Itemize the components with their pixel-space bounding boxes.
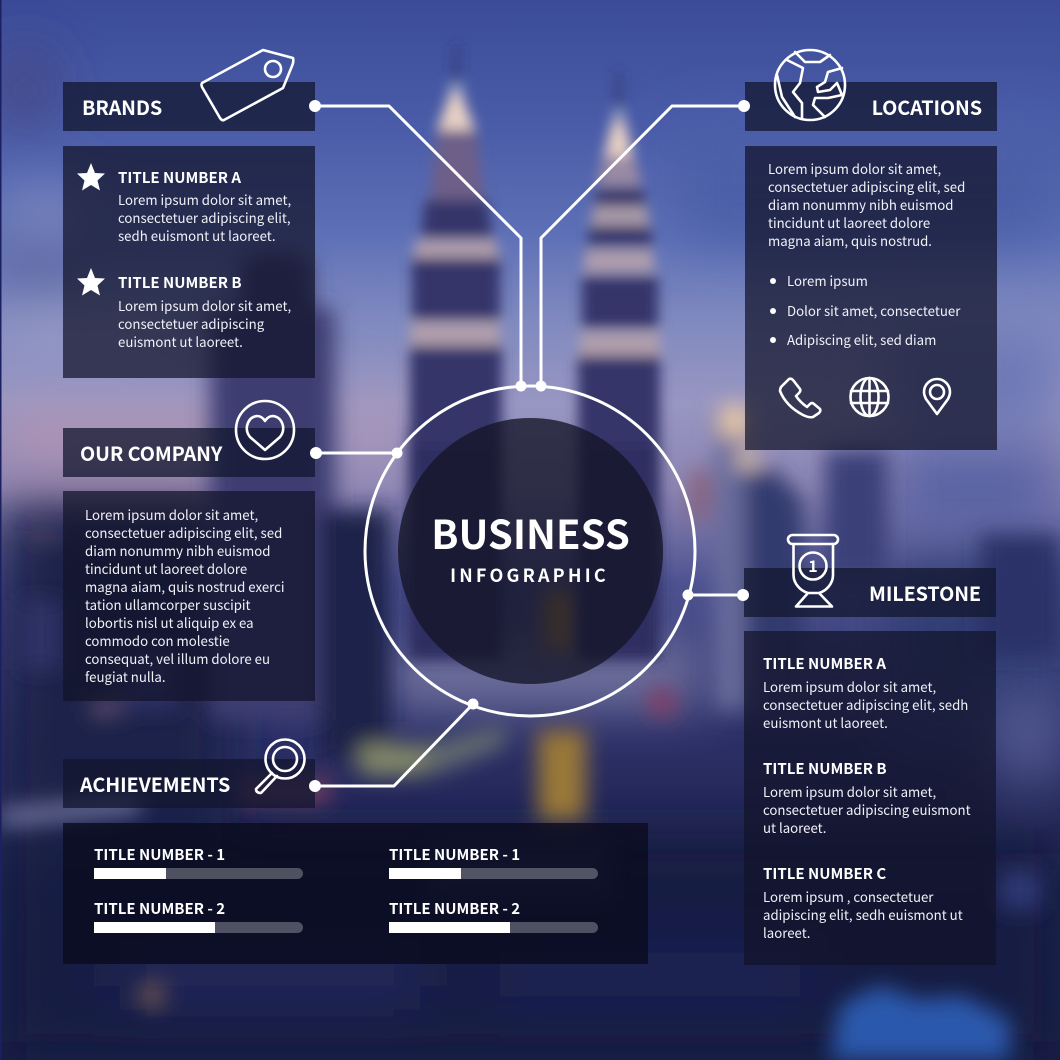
body B: [118, 296, 291, 351]
company text box: tation ullamcorper suscipit: [85, 595, 251, 614]
body A: [118, 190, 291, 245]
header: brands: [63, 82, 315, 131]
header: our company: [63, 428, 315, 477]
company text box: Lorem ipsum dolor sit amet,: [85, 505, 258, 524]
title A: TITLE NUMBER A: [763, 653, 886, 674]
brands content box: [63, 146, 315, 378]
bullet list: [770, 271, 960, 349]
company text box: tincidunt ut laoreet dolore: [85, 559, 247, 578]
title B: TITLE NUMBER B: [763, 758, 887, 779]
subtitle: INFOGRAPHIC: [450, 562, 609, 588]
intro text: [768, 159, 965, 250]
body A: [763, 677, 968, 732]
company text box: [63, 491, 315, 701]
body B: Lorem ipsum dolor sit amet,: [118, 296, 291, 315]
title C: TITLE NUMBER C: [763, 863, 886, 884]
body B: Lorem ipsum dolor sit amet,: [763, 782, 936, 801]
icon: earth globe: [774, 48, 846, 122]
body B: consectetuer adipiscing euismont: [763, 800, 971, 819]
company text box: diam nonummy nibh euismod: [85, 541, 270, 560]
icon: trophy: 1: [808, 553, 818, 577]
body A: consectetuer adipiscing elit,: [118, 208, 291, 227]
body A: Lorem ipsum dolor sit amet,: [118, 190, 291, 209]
icon: heart: [234, 400, 296, 460]
locations content box: [745, 146, 997, 450]
bar: left 2: TITLE NUMBER - 2: [94, 898, 225, 919]
intro text: consectetuer adipiscing elit, sed: [768, 177, 965, 196]
header: our company: OUR COMPANY: [80, 438, 222, 467]
company text box: consectetuer adipiscing elit, sed: [85, 523, 282, 542]
header: milestone: MILESTONE: [869, 578, 981, 607]
intro text: Lorem ipsum dolor sit amet,: [768, 159, 941, 178]
body B: ut laoreet.: [763, 818, 826, 837]
bullet list: Dolor sit amet, consectetuer: [787, 301, 960, 320]
centre circle with title: [398, 418, 663, 684]
company text box: consequat, vel illum dolore eu: [85, 649, 270, 668]
body A: Lorem ipsum dolor sit amet,: [763, 677, 936, 696]
body A: sedh euismont ut laoreet.: [118, 226, 276, 245]
company text box: magna aiam, quis nostrud exerci: [85, 577, 284, 596]
header: milestone: [744, 568, 996, 617]
bar: right 1: [389, 844, 598, 879]
panel: achievements: [63, 738, 648, 964]
icon: star A: [77, 163, 105, 190]
bar: right 2: TITLE NUMBER - 2: [389, 898, 520, 919]
bar: left 1: [94, 844, 303, 879]
header: achievements: [63, 759, 315, 808]
bar: left 2: [94, 898, 303, 933]
intro text: magna aiam, quis nostrud.: [768, 231, 932, 250]
header: locations: LOCATIONS: [872, 92, 982, 121]
body C: adipiscing elit, sedh euismont ut: [763, 905, 963, 924]
panel: locations: [745, 48, 997, 450]
company text box: commodo con molestie: [85, 631, 230, 650]
body C: laoreet.: [763, 923, 810, 942]
contact icons: [778, 376, 952, 418]
icon: price tag: [200, 48, 295, 122]
body B: [763, 782, 971, 837]
company text box: lobortis nisl ut aliquip ex ea: [85, 613, 254, 632]
header: locations: [745, 82, 997, 131]
header: brands: BRANDS: [82, 92, 162, 121]
progress box: [63, 823, 648, 964]
panel: milestone: [744, 534, 996, 965]
main title: BUSINESS: [431, 503, 630, 561]
icon: star B: [77, 268, 105, 296]
body B: consectetuer adipiscing: [118, 314, 264, 333]
body A: euismont ut laoreet.: [763, 713, 888, 732]
body C: [763, 887, 963, 942]
milestone content box: [744, 631, 996, 965]
body C: Lorem ipsum , consectetuer: [763, 887, 933, 906]
bullet list: Adipiscing elit, sed diam: [787, 330, 936, 349]
bar: left 1: TITLE NUMBER - 1: [94, 844, 225, 865]
body B: euismont ut laoreet.: [118, 332, 243, 351]
icon: trophy: [786, 534, 840, 608]
title B: TITLE NUMBER B: [118, 272, 242, 293]
intro text: diam nonummy nibh euismod: [768, 195, 953, 214]
panel: our company: [63, 400, 315, 701]
body A: consectetuer adipiscing elit, sedh: [763, 695, 968, 714]
intro text: tincidunt ut laoreet dolore: [768, 213, 930, 232]
icon: magnifier: [254, 738, 306, 794]
title A: TITLE NUMBER A: [118, 167, 241, 188]
header: achievements: ACHIEVEMENTS: [80, 769, 230, 798]
company text box: feugiat nulla.: [85, 667, 166, 686]
panel: brands: [63, 48, 315, 378]
bullet list: Lorem ipsum: [787, 271, 868, 290]
bar: right 1: TITLE NUMBER - 1: [389, 844, 520, 865]
bar: right 2: [389, 898, 598, 933]
